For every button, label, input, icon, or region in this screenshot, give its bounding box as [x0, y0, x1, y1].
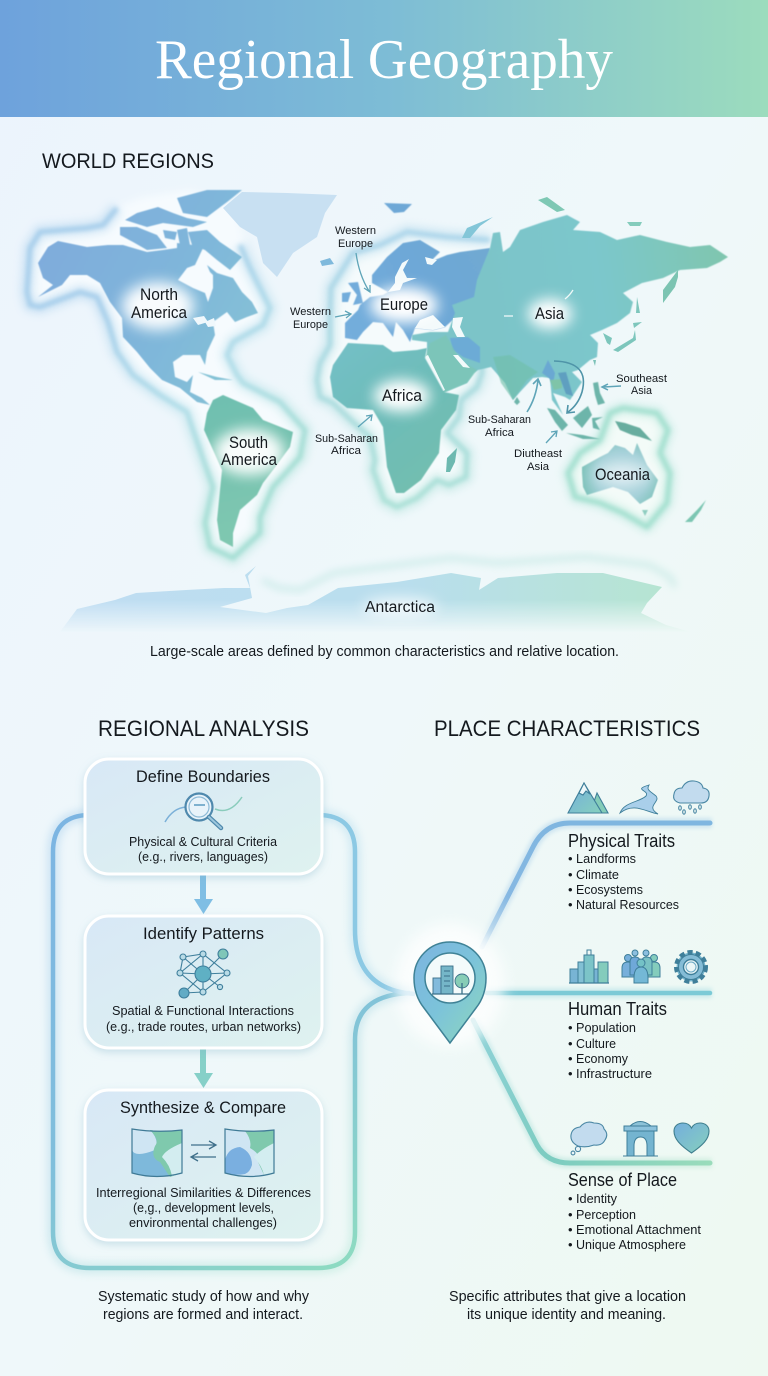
caption: world regions: Large-scale areas defined by common characteristics and relative location.	[150, 644, 619, 660]
label: Diutheast Asia: Diutheast	[514, 448, 562, 460]
panel: world map	[27, 190, 728, 632]
branch lines	[473, 823, 712, 1163]
land: Greenland and Iceland	[223, 192, 337, 277]
Iran, Arabia, South and Southeast Asia patches	[425, 335, 573, 400]
icon: right map	[225, 1129, 274, 1176]
label: Europe: Europe	[380, 296, 428, 314]
caption: place characteristics	[449, 1289, 686, 1323]
label: Sub-Saharan Africa right	[468, 414, 531, 439]
icon: monument arch	[623, 1122, 658, 1156]
label: Diutheast Asia: Asia	[527, 461, 550, 473]
list: physical traits: •	[568, 851, 573, 866]
box: define boundaries: Physical & Cultural Criteria	[129, 834, 278, 849]
list: physical traits: Landforms	[576, 851, 636, 866]
icon: exchange arrows	[191, 1141, 216, 1161]
land: Asia	[412, 197, 728, 415]
icon: left map	[132, 1129, 182, 1177]
label: North America: North	[140, 286, 178, 304]
label: Southeast Asia: Southeast	[616, 373, 667, 385]
icon: city skyline	[569, 950, 609, 983]
icon: rain cloud	[674, 781, 709, 814]
land: Oceania	[582, 421, 706, 522]
label: Antarctica: Antarctica	[365, 599, 435, 616]
box: identify patterns: (e.g., trade routes, urban networks)	[106, 1019, 301, 1034]
panel: regional analysis flow	[53, 759, 415, 1268]
pin glow	[395, 923, 505, 1047]
land: Africa	[330, 343, 459, 493]
list: human traits: •	[568, 1051, 573, 1066]
caption: regional analysis: Systematic study of how and why	[98, 1289, 310, 1305]
label: South America: America	[221, 451, 278, 469]
list: physical traits: Ecosystems	[576, 882, 643, 897]
arrow: Western Europe top	[356, 253, 370, 292]
list: human traits: •	[568, 1036, 573, 1051]
list: sense of place: •	[568, 1207, 573, 1222]
land: Antarctica	[64, 566, 673, 628]
list: physical traits: Climate	[576, 867, 619, 882]
list: sense of place: •	[568, 1191, 573, 1206]
label: Western Europe top: Europe	[338, 238, 373, 250]
heading: physical traits: Physical Traits	[568, 831, 675, 851]
label: Sub-Saharan Africa right: Sub-Saharan	[468, 414, 531, 426]
arrow: circular Southeast Asia	[554, 361, 583, 413]
box: synthesize and compare: Interregional Similarities & Differences	[96, 1185, 311, 1200]
label: Asia: Asia	[535, 305, 565, 323]
list: human traits	[568, 1020, 652, 1081]
label: Sub-Saharan Africa left	[315, 433, 378, 457]
label: Oceania: Oceania	[595, 466, 651, 484]
map arrows	[335, 253, 621, 443]
heading: place characteristics: PLACE CHARACTERISTICS	[434, 716, 700, 741]
box: define boundaries: Define Boundaries	[136, 767, 270, 786]
caption: regional analysis: regions are formed and interact.	[103, 1307, 303, 1323]
box: synthesize and compare: environmental challenges)	[129, 1215, 277, 1230]
box: synthesize and compare	[85, 1090, 322, 1240]
caption: place characteristics: Specific attributes that give a location	[449, 1289, 686, 1305]
Antarctica halo	[262, 557, 675, 590]
arrow: patterns to synthesize	[194, 1048, 213, 1088]
heading: regional analysis: REGIONAL ANALYSIS	[98, 716, 309, 741]
arrow: Western Europe left	[335, 311, 351, 318]
label: South America: South	[229, 434, 268, 452]
label: North America	[131, 286, 188, 322]
box: synthesize and compare: Synthesize & Compare	[120, 1098, 286, 1117]
halo: Oceania	[568, 408, 670, 527]
panel: place characteristics	[395, 781, 712, 1252]
icon: network	[177, 949, 230, 998]
seas	[388, 257, 470, 393]
box: identify patterns	[85, 916, 322, 1048]
land: North America	[38, 190, 258, 405]
label: Africa: Africa	[382, 387, 423, 405]
land: Europe	[342, 203, 490, 342]
label: Western Europe top: Western	[335, 225, 376, 237]
list: sense of place: Emotional Attachment	[576, 1222, 701, 1237]
box: identify patterns: Identify Patterns	[143, 924, 264, 943]
halo: Europe and Africa	[317, 232, 490, 507]
title banner: Regional Geography	[155, 29, 613, 91]
land: South America	[204, 395, 293, 547]
heading: sense of place: Sense of Place	[568, 1170, 677, 1190]
label: Diutheast Asia	[514, 448, 562, 473]
Baikal and Aral lakes	[504, 290, 573, 316]
box: define boundaries: (e.g., rivers, languages)	[138, 849, 268, 864]
glow behind labels	[122, 282, 653, 616]
list: human traits: •	[568, 1066, 573, 1081]
label: North America: America	[131, 304, 188, 322]
land: Madagascar	[446, 448, 457, 472]
list: physical traits: Natural Resources	[576, 897, 679, 912]
icon: people group	[622, 950, 660, 983]
caption: place characteristics: its unique identity and meaning.	[467, 1307, 666, 1323]
icon: gear	[676, 952, 706, 982]
label: Southeast Asia	[616, 373, 667, 397]
icon: mountains	[568, 783, 608, 813]
heading: world regions: WORLD REGIONS	[42, 149, 214, 173]
arrow: Diutheast Asia	[546, 431, 557, 443]
label: Sub-Saharan Africa right: Africa	[485, 427, 515, 439]
list: human traits: Population	[576, 1020, 636, 1035]
list: sense of place: •	[568, 1222, 573, 1237]
label: Southeast Asia: Asia	[631, 385, 653, 397]
caption: regional analysis	[98, 1289, 310, 1323]
icon: magnifier over boundary line	[165, 794, 242, 828]
arrow: Sub-Saharan left	[358, 415, 372, 427]
list: physical traits: •	[568, 867, 573, 882]
box: identify patterns: Spatial & Functional Interactions	[112, 1003, 294, 1018]
icon: river	[620, 785, 658, 814]
icon: heart	[674, 1123, 709, 1153]
Great Lakes	[193, 316, 216, 327]
arrow: Sub-Saharan right	[527, 379, 541, 412]
box: synthesize and compare: (e,g., development levels,	[133, 1200, 274, 1215]
heading: human traits: Human Traits	[568, 999, 667, 1019]
icon: thought cloud	[571, 1122, 607, 1155]
list: physical traits: •	[568, 897, 573, 912]
list: sense of place: •	[568, 1237, 573, 1252]
list: physical traits: •	[568, 882, 573, 897]
label: Sub-Saharan Africa left: Sub-Saharan	[315, 433, 378, 445]
list: sense of place	[568, 1191, 701, 1252]
land: Maritime Southeast Asia	[514, 382, 605, 439]
list: sense of place: Identity	[576, 1191, 617, 1206]
label: South America	[221, 434, 278, 469]
list: sense of place: Unique Atmosphere	[576, 1237, 686, 1252]
label: Western Europe left: Western	[290, 306, 331, 318]
halo: Americas	[27, 190, 305, 558]
box: define boundaries	[85, 759, 322, 874]
list: human traits: Economy	[576, 1051, 628, 1066]
label: Western Europe top	[335, 225, 376, 250]
arrow: Southeast Asia	[602, 384, 621, 390]
list: physical traits	[568, 851, 679, 912]
label: Western Europe left	[290, 306, 331, 331]
label: Western Europe left: Europe	[293, 319, 328, 331]
list: sense of place: Perception	[576, 1207, 636, 1222]
list: human traits: Infrastructure	[576, 1066, 652, 1081]
arrow: boundaries to patterns	[194, 874, 213, 914]
icon: location pin	[414, 942, 486, 1043]
list: human traits: •	[568, 1020, 573, 1035]
title banner	[0, 0, 768, 117]
feedback loop lines	[53, 815, 415, 1268]
label: Sub-Saharan Africa left: Africa	[331, 445, 362, 457]
list: human traits: Culture	[576, 1036, 616, 1051]
